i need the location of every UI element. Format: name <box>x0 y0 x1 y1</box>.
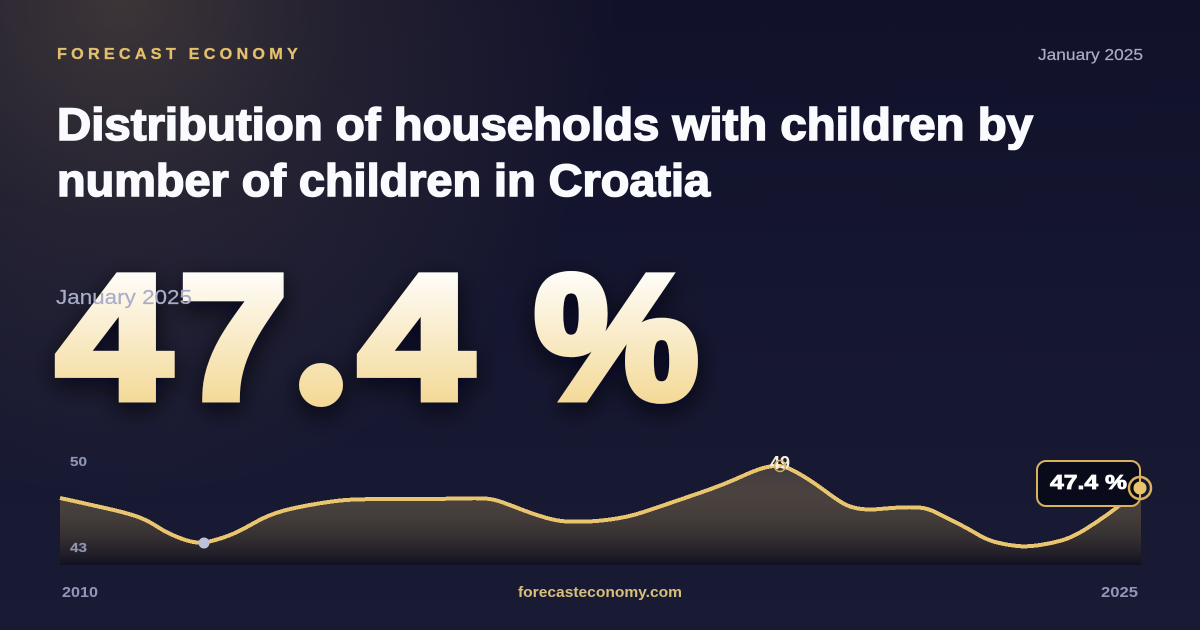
title <box>57 99 1033 206</box>
peak label: 49 <box>770 453 790 473</box>
y axis min: 43 <box>70 540 87 555</box>
big value: 4 <box>57 239 171 436</box>
y axis max: 50 <box>70 454 87 469</box>
value badge <box>1037 461 1140 506</box>
x axis start: 2010 <box>62 585 98 601</box>
date top right: January 2025 <box>1038 47 1143 64</box>
big value: % <box>535 240 698 436</box>
big value: 4 <box>359 239 473 436</box>
big value: 7 <box>180 240 287 436</box>
peak marker <box>774 460 786 472</box>
brand label: FORECAST ECONOMY <box>57 46 302 63</box>
value badge: 47.4 % <box>1050 471 1127 494</box>
title: Distribution of households with children by <box>57 99 1033 150</box>
chart line <box>60 466 1141 546</box>
end marker <box>1129 477 1151 499</box>
area chart <box>60 453 1141 565</box>
big value <box>57 239 698 436</box>
date subtitle: January 2025 <box>56 286 192 309</box>
x axis end: 2025 <box>1101 585 1138 601</box>
source url: forecasteconomy.com <box>518 585 682 601</box>
chart area fill <box>60 466 1141 565</box>
minimum point <box>198 538 210 548</box>
title: number of children in Croatia <box>57 155 711 206</box>
big value: . <box>296 240 345 436</box>
